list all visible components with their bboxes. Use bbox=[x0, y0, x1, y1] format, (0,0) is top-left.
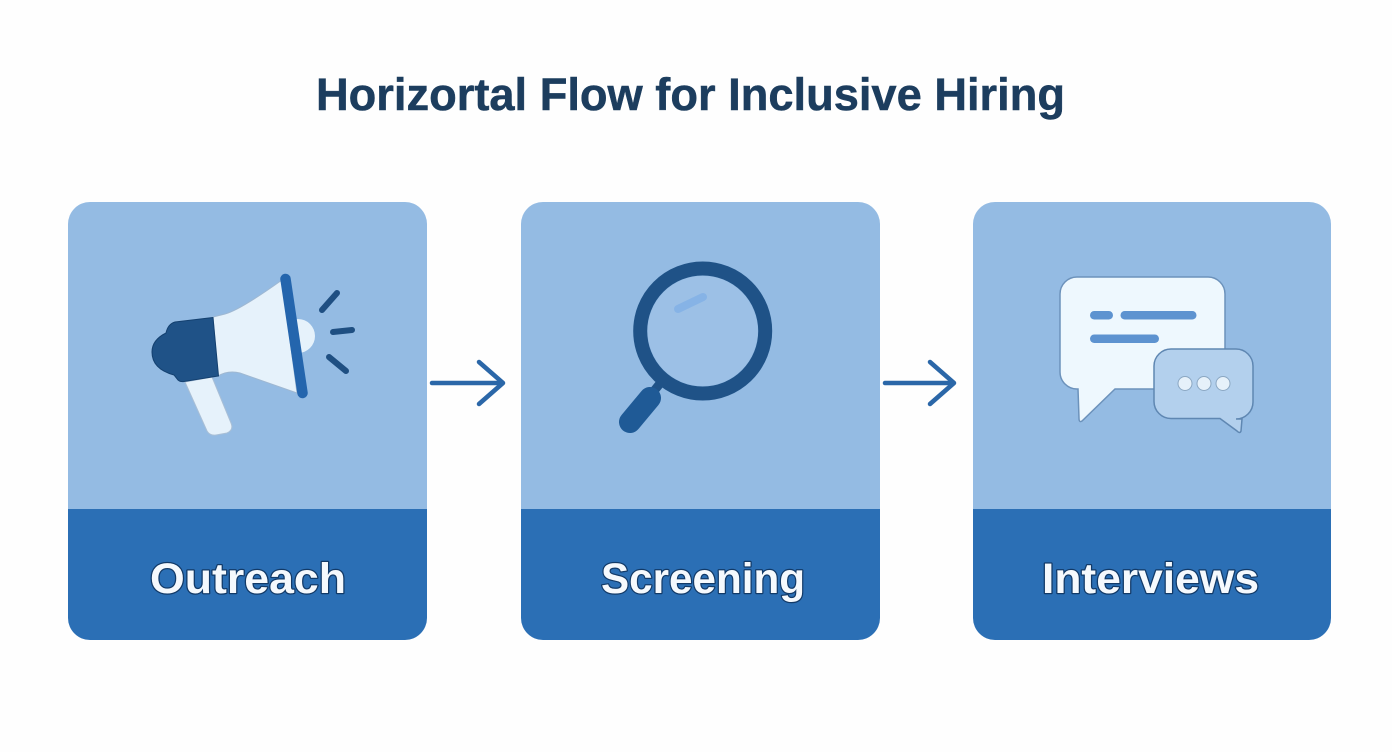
card footer: outreach bbox=[68, 509, 427, 640]
label: outreach: Outreach bbox=[150, 555, 346, 603]
card top: interviews bbox=[973, 202, 1331, 509]
panel: screening bbox=[521, 202, 880, 640]
icon: megaphone bbox=[152, 279, 352, 435]
card footer: interviews bbox=[973, 509, 1331, 640]
label: interviews: Interviews bbox=[1042, 555, 1259, 603]
card top: outreach bbox=[68, 202, 427, 509]
arrow: outreach to screening bbox=[432, 362, 503, 404]
card top: screening bbox=[521, 202, 880, 509]
panel: interviews bbox=[973, 202, 1331, 640]
icon: magnifying glass bbox=[630, 268, 765, 422]
panel: outreach bbox=[68, 202, 427, 640]
label: screening: Screening bbox=[601, 555, 805, 603]
arrow: screening to interviews bbox=[885, 362, 954, 404]
title: Horizortal Flow for Inclusive Hiring bbox=[316, 69, 1065, 120]
icon: chat bubbles bbox=[1060, 277, 1253, 432]
card footer: screening bbox=[521, 509, 880, 640]
